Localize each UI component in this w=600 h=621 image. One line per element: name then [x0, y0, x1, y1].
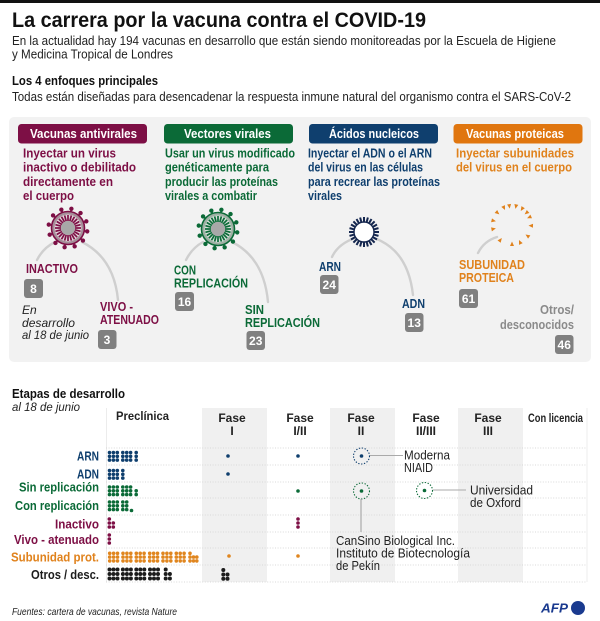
- arcs: antiviral branches: [37, 242, 118, 300]
- count: 3: 3: [104, 333, 111, 347]
- phase column shading: [202, 408, 523, 582]
- count: 61: [459, 289, 478, 308]
- label: VIVO - ATENUADO: ATENUADO: [100, 313, 159, 327]
- label: Otros/desconocidos: [500, 303, 574, 332]
- column headers: I: [230, 424, 234, 438]
- note: date: [22, 303, 89, 342]
- logo: AFP: AFP: [540, 600, 568, 616]
- column headers: II: [358, 424, 364, 438]
- dots: Sin replicación: [108, 485, 300, 496]
- chart: development stages matrix: [11, 408, 587, 582]
- intro text: En la actualidad hay 194 vacunas en desarrollo que están siendo monitoreadas por la Escuela de Higiene: [12, 34, 556, 48]
- count: 61: 61: [462, 292, 475, 306]
- source note: Fuentes: cartera de vacunas, revista Nature: [12, 606, 177, 618]
- top black bar: [0, 0, 600, 3]
- label: CON REPLICACIÓN: [174, 264, 248, 290]
- note: date: En: [22, 303, 37, 317]
- icon: vector virus: [197, 208, 239, 250]
- arcs: vector branches: [186, 242, 268, 302]
- label: Otros/desconocidos: desconocidos: [500, 318, 574, 332]
- panel: viral vectors: [164, 124, 320, 350]
- description: vectors: genéticamente para: [165, 160, 270, 174]
- count: 23: [246, 331, 265, 350]
- label: ADN: ADN: [402, 297, 425, 311]
- column headers: Fase: [412, 411, 440, 425]
- row labels: Inactivo: [55, 518, 99, 532]
- row labels: Vivo - atenuado: [14, 533, 99, 547]
- row labels: Con replicación: [15, 499, 99, 513]
- description: nucleic: para recrear las proteínas: [308, 175, 440, 189]
- dots: Subunidad proteica: [108, 552, 300, 563]
- highlight: Universidad de Oxford: [416, 482, 533, 510]
- dots: ARN: [108, 451, 300, 462]
- description: vectors: producir las proteínas: [165, 175, 278, 189]
- count: 46: 46: [558, 338, 571, 352]
- description: nucleic: Inyectar el ADN o el ARN: [308, 146, 432, 160]
- arcs: nucleic branches: [332, 238, 413, 295]
- count: 46: [555, 335, 574, 354]
- description: vectors: virales a combatir: [165, 189, 257, 203]
- label: SUBUNIDAD PROTEICA: [459, 258, 525, 285]
- row labels: [11, 450, 99, 582]
- description: protein: [456, 146, 574, 174]
- header: Vacunas antivirales: [18, 124, 147, 144]
- highlight: CanSino: Instituto de Biotecnología: [336, 546, 470, 560]
- highlight: Universidad de Oxford: Universidad: [470, 484, 533, 498]
- description: antiviral: el cuerpo: [23, 189, 74, 203]
- description: protein: Inyectar subunidades: [456, 146, 574, 160]
- highlight: Moderna NIAID: [354, 448, 450, 475]
- heading: development stages: Etapas de desarrollo: [12, 386, 125, 401]
- column edges and row gridlines: [106, 408, 587, 582]
- label: CON REPLICACIÓN: REPLICACIÓN: [174, 276, 248, 290]
- icon: nucleic acid ring: [349, 217, 379, 247]
- row labels: Sin replicación: [19, 480, 99, 494]
- dots: Inactivo: [108, 517, 300, 529]
- panel: protein vaccines: [454, 124, 582, 354]
- label: Otros/desconocidos: Otros/: [540, 303, 574, 317]
- section heading: approaches: Los 4 enfoques principales: [12, 74, 158, 88]
- label: SIN REPLICACIÓN: SIN: [245, 303, 264, 317]
- count: 16: 16: [178, 295, 191, 309]
- column headers: [116, 409, 583, 438]
- description: nucleic: del virus en las células: [308, 160, 423, 174]
- header: Vacunas proteicas: Vacunas proteicas: [466, 127, 564, 141]
- title: La carrera por la vacuna contra el COVID-19: [12, 9, 426, 32]
- description: antiviral: Inyectar un virus: [23, 146, 116, 160]
- subheading: date: al 18 de junio: [12, 400, 80, 414]
- label: INACTIVO: INACTIVO: [26, 262, 78, 276]
- panel: approaches background: [9, 117, 591, 362]
- column headers: Fase: [218, 411, 246, 425]
- count: 8: 8: [30, 282, 37, 296]
- column headers: Preclínica: [116, 409, 169, 423]
- header: Ácidos nucleicos: [309, 124, 438, 144]
- dots: ADN: [108, 469, 230, 480]
- header: Vacunas antivirales: Vacunas antivirales: [30, 127, 137, 141]
- highlight: CanSino: CanSino Biological Inc.: [336, 534, 455, 548]
- description: vectors: [165, 146, 295, 203]
- highlight: Moderna NIAID: Moderna: [404, 448, 450, 462]
- header: Vacunas proteicas: [454, 124, 582, 144]
- dots: Otros / desconocidos: [108, 568, 230, 581]
- icon: inactivated virus: [47, 207, 89, 249]
- description: antiviral: directamente en: [23, 175, 113, 189]
- label: SUBUNIDAD PROTEICA: SUBUNIDAD: [459, 258, 525, 272]
- row labels: Otros / desc.: [31, 568, 99, 582]
- row labels: Subunidad prot.: [11, 550, 99, 564]
- count: 23: 23: [249, 334, 263, 348]
- dots: Vivo atenuado: [108, 533, 111, 545]
- highlight: Universidad de Oxford: de Oxford: [470, 496, 521, 510]
- column headers: II/III: [416, 424, 436, 438]
- count: 24: 24: [323, 278, 336, 292]
- description: protein: del virus en el cuerpo: [456, 160, 572, 174]
- header: Vectores virales: Vectores virales: [184, 127, 271, 141]
- logo: AFP: [540, 600, 585, 616]
- label: VIVO - ATENUADO: VIVO -: [100, 300, 133, 314]
- row labels: ARN: [77, 450, 99, 464]
- count: 16: [175, 292, 194, 311]
- highlight: CanSino: [336, 483, 470, 573]
- header: Vectores virales: [164, 124, 293, 144]
- label: CON REPLICACIÓN: CON: [174, 264, 196, 278]
- panel: nucleic acids: [308, 124, 440, 332]
- description: nucleic: virales: [308, 189, 342, 203]
- label: ARN: ARN: [319, 260, 341, 274]
- description: vectors: Usar un virus modificado: [165, 146, 295, 160]
- column headers: Fase: [347, 411, 375, 425]
- icon: protein subunits: [491, 204, 533, 246]
- dots: Con replicación: [108, 500, 133, 512]
- column headers: III: [483, 424, 493, 438]
- label: SIN REPLICACIÓN: [245, 303, 320, 330]
- label: SUBUNIDAD PROTEICA: PROTEICA: [459, 271, 514, 285]
- header: Ácidos nucleicos: Ácidos nucleicos: [329, 126, 419, 141]
- note: date: desarrollo: [22, 316, 75, 330]
- description: antiviral: inactivo o debilitado: [23, 160, 136, 174]
- column headers: Fase: [474, 411, 502, 425]
- count: 8: [24, 279, 43, 298]
- label: SIN REPLICACIÓN: REPLICACIÓN: [245, 315, 320, 330]
- intro text: [12, 34, 556, 62]
- description: antiviral: [23, 146, 136, 203]
- note: date: al 18 de junio: [22, 328, 89, 342]
- highlight: CanSino: de Pekín: [336, 559, 380, 573]
- column headers: I/II: [293, 424, 307, 438]
- count: 13: [405, 313, 424, 332]
- row labels: ADN: [77, 468, 99, 482]
- label: VIVO - ATENUADO: [100, 300, 159, 327]
- intro text: y Medicina Tropical de Londres: [12, 48, 173, 62]
- panel: antiviral vaccines: [18, 124, 159, 349]
- highlight: Moderna NIAID: NIAID: [404, 461, 433, 475]
- column headers: Con licencia: [528, 411, 583, 425]
- count: 13: 13: [408, 316, 421, 330]
- count: 24: [320, 275, 338, 294]
- column headers: Fase: [286, 411, 314, 425]
- count: 3: [98, 330, 116, 349]
- description: nucleic: [308, 146, 440, 203]
- arc: protein branch: [478, 237, 497, 253]
